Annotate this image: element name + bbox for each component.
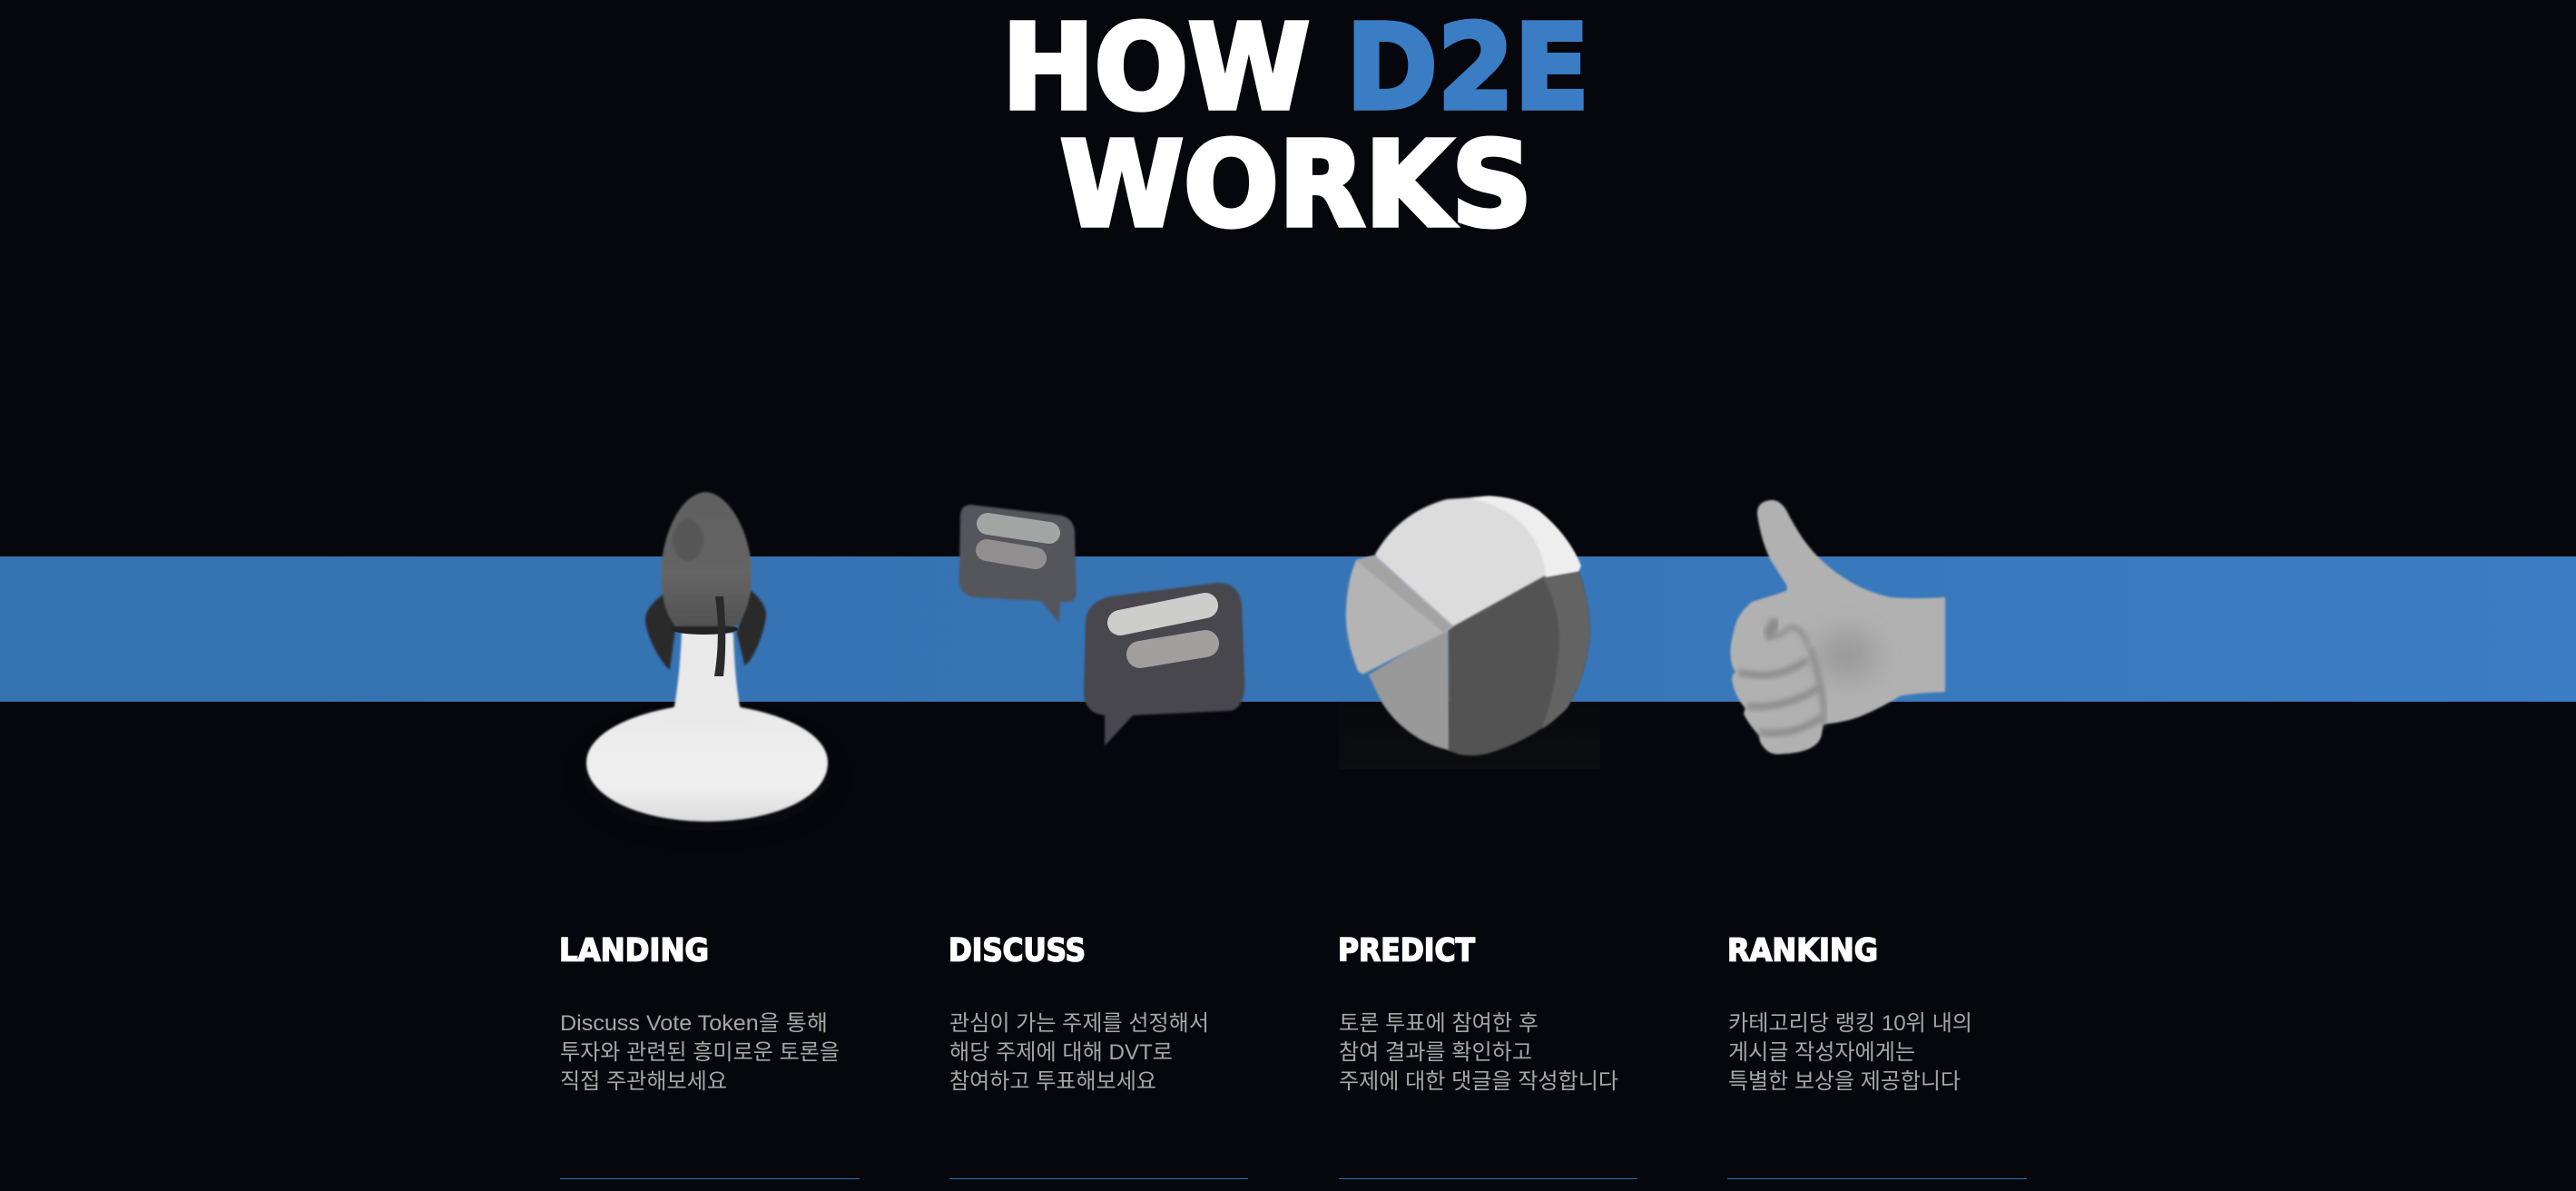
title word: D2E: D2E <box>1346 0 1589 136</box>
description: landing: Discuss Vote Token을 통해 <box>560 1011 828 1036</box>
icon: thumbs up hand <box>1730 500 1945 754</box>
description: discuss <box>949 1011 1209 1094</box>
description: landing: 투자와 관련된 흥미로운 토론을 <box>560 1040 840 1065</box>
large bubble <box>1084 583 1244 746</box>
description: predict: 토론 투표에 참여한 후 <box>1339 1011 1539 1036</box>
description: landing: 직접 주관해보세요 <box>560 1069 727 1094</box>
icon: pie chart <box>1339 497 1600 769</box>
description: predict: 참여 결과를 확인하고 <box>1339 1040 1532 1065</box>
description: ranking: 게시글 작성자에게는 <box>1728 1040 1915 1065</box>
panel: ranking <box>1727 500 2027 1179</box>
title <box>1002 0 1589 253</box>
heading: RANKING: RANKING <box>1727 933 1878 970</box>
small bubble <box>959 505 1077 623</box>
description: discuss: 참여하고 투표해보세요 <box>949 1069 1156 1094</box>
panel: predict <box>1338 497 1637 1179</box>
panel: discuss <box>949 505 1248 1179</box>
description: landing <box>560 1011 840 1094</box>
description: discuss: 해당 주제에 대해 DVT로 <box>949 1040 1173 1065</box>
panel: landing <box>559 492 860 1179</box>
title word: HOW: HOW <box>1002 0 1310 136</box>
heading: PREDICT: PREDICT <box>1338 933 1475 970</box>
description: ranking: 카테고리당 랭킹 10위 내의 <box>1728 1011 1972 1036</box>
description: discuss: 관심이 가는 주제를 선정해서 <box>949 1011 1209 1036</box>
heading: DISCUSS: DISCUSS <box>949 933 1086 970</box>
description: predict <box>1339 1011 1618 1094</box>
icon: rocket <box>586 492 828 822</box>
description: predict: 주제에 대한 댓글을 작성합니다 <box>1339 1069 1618 1094</box>
heading: LANDING: LANDING <box>559 933 709 970</box>
blue horizontal band <box>0 556 2576 702</box>
description: ranking: 특별한 보상을 제공합니다 <box>1728 1069 1961 1094</box>
icon: speech bubbles <box>959 505 1244 746</box>
description: ranking <box>1728 1011 1972 1094</box>
title word: WORKS: WORKS <box>1060 117 1532 253</box>
